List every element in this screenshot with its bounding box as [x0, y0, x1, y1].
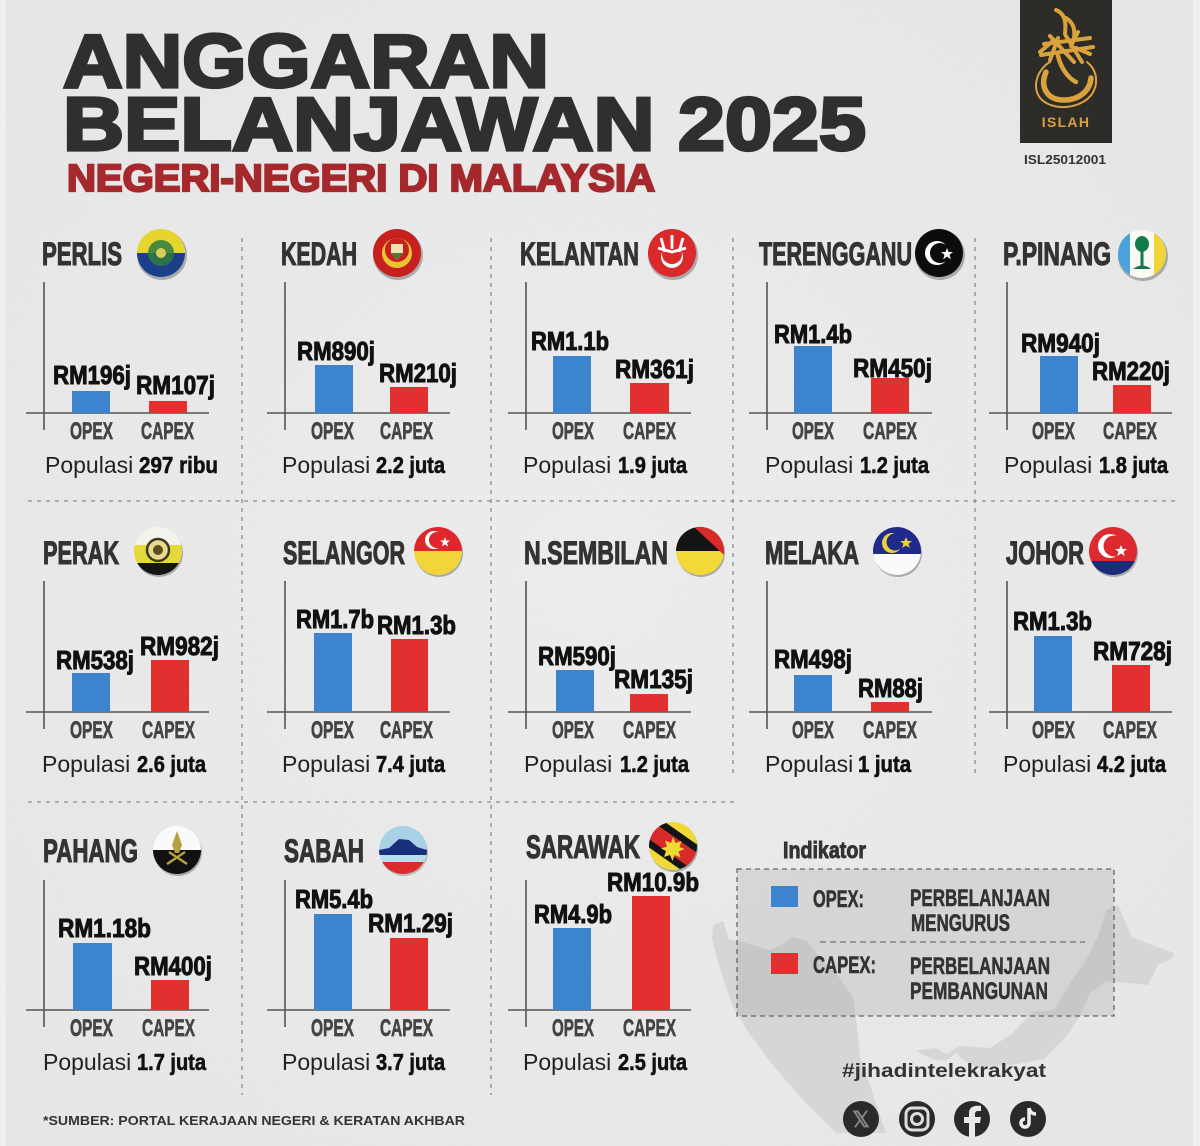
icon: Sabah flag: [379, 826, 428, 876]
panel: Selangor: OPEX: [311, 717, 354, 744]
source note: *SUMBER: PORTAL KERAJAAN NEGERI & KERATAN AKHBAR: [43, 1113, 466, 1128]
panel: P.Pinang: OPEX: [1032, 418, 1075, 445]
panel: Sabah: 3.7 juta: [376, 1049, 445, 1075]
icon: Perak flag: [134, 527, 183, 577]
panel: Kelantan: RM1.1b: [531, 326, 609, 356]
panel: Terengganu: RM1.4b: [774, 319, 852, 349]
panel: Terengganu: RM450j: [853, 353, 932, 383]
panel: Terengganu: CAPEX: [863, 418, 917, 445]
legend: [737, 869, 1114, 1016]
panel: Perlis: RM107j: [136, 370, 215, 400]
panel: Perlis: CAPEX: [141, 418, 194, 445]
panel: Pahang: [26, 826, 212, 1075]
panel: Perlis: PERLIS: [42, 236, 122, 272]
panel: Selangor: RM1.3b: [377, 610, 456, 640]
panel: Melaka: Populasi: [765, 751, 853, 777]
panel: Terengganu: Populasi: [765, 452, 853, 478]
panel: Johor: JOHOR: [1006, 535, 1084, 571]
panel: Sabah: RM5.4b: [295, 884, 373, 914]
icon: Selangor flag: [414, 527, 463, 577]
logo: ISLAH: [1020, 0, 1112, 143]
icon: Penang flag: [1118, 230, 1168, 281]
panel: Perlis: RM196j: [53, 360, 131, 390]
panel: Perak: OPEX: [70, 717, 113, 744]
hashtag: #jihadintelekrakyat: [842, 1061, 1047, 1082]
panel: Melaka: CAPEX: [863, 717, 917, 744]
panel: P.Pinang: Populasi: [1004, 452, 1092, 478]
panel: N.Sembilan: [508, 527, 725, 777]
panel: Johor: Populasi: [1003, 751, 1091, 777]
panel: Kedah: Populasi: [282, 452, 370, 478]
legend: MENGURUS: [911, 910, 1010, 937]
panel: Kedah: [267, 229, 457, 478]
panel: Sabah: Populasi: [282, 1049, 370, 1075]
legend: CAPEX:: [813, 952, 876, 979]
panel: P.Pinang: P.PINANG: [1003, 236, 1111, 272]
icon: X: 𝕏: [852, 1107, 870, 1132]
legend: OPEX:: [813, 886, 864, 913]
panel: N.Sembilan: Populasi: [524, 751, 612, 777]
legend: PERBELANJAAN: [910, 953, 1050, 980]
panel: N.Sembilan: OPEX: [552, 717, 594, 744]
panel: Kedah: RM890j: [297, 336, 375, 366]
panel: Perlis: OPEX: [70, 418, 113, 445]
panel: Kelantan: RM361j: [615, 354, 694, 384]
panel: Perak: RM982j: [140, 631, 219, 661]
icon: Melaka flag: [873, 527, 922, 577]
title: BELANJAWAN 2025: [63, 82, 866, 166]
panel: Kelantan: CAPEX: [623, 418, 676, 445]
panel: Sabah: OPEX: [311, 1015, 354, 1042]
panel: Johor: RM1.3b: [1013, 606, 1092, 636]
panel: Kedah: RM210j: [379, 358, 457, 388]
panel: Sarawak: Populasi: [523, 1049, 611, 1075]
panel: N.Sembilan: 1.2 juta: [620, 751, 689, 777]
icon: Kedah flag: [373, 229, 423, 280]
panel: Sarawak: SARAWAK: [526, 829, 640, 865]
legend heading: Indikator: [783, 837, 866, 863]
panel: Selangor: RM1.7b: [296, 604, 374, 634]
icon: Terengganu flag: [915, 229, 965, 280]
panel: Perak: 2.6 juta: [137, 751, 206, 777]
icon: X: [843, 1101, 879, 1137]
panel: Sabah: SABAH: [284, 833, 364, 869]
panel: Johor: 4.2 juta: [1097, 751, 1166, 777]
icon: Kelantan flag: [648, 229, 698, 280]
panel: Melaka: 1 juta: [858, 751, 911, 777]
panel: Johor: [989, 527, 1172, 777]
panel: Perak: RM538j: [56, 645, 134, 675]
panel: Sarawak: RM4.9b: [534, 899, 612, 929]
panel: Kedah: CAPEX: [380, 418, 433, 445]
background map of Malaysia: [712, 905, 1174, 1133]
panel: Kelantan: KELANTAN: [520, 236, 639, 272]
panel: P.Pinang: CAPEX: [1103, 418, 1157, 445]
panel: Kelantan: OPEX: [552, 418, 594, 445]
panel: Kelantan: 1.9 juta: [618, 452, 687, 478]
legend: PERBELANJAAN: [910, 885, 1050, 912]
panel: Johor: OPEX: [1032, 717, 1075, 744]
panel: Perak: CAPEX: [142, 717, 195, 744]
subtitle: NEGERI-NEGERI DI MALAYSIA: [67, 158, 655, 200]
panel: Terengganu: TERENGGANU: [759, 236, 912, 272]
panel: Kedah: OPEX: [311, 418, 354, 445]
panel: N.Sembilan: CAPEX: [623, 717, 676, 744]
panel: Sabah: CAPEX: [380, 1015, 433, 1042]
panel: N.Sembilan: RM590j: [538, 641, 616, 671]
panel: Pahang: OPEX: [70, 1015, 113, 1042]
panel: Kedah: 2.2 juta: [376, 452, 445, 478]
panel: Pahang: Populasi: [43, 1049, 131, 1075]
panel: Selangor: [267, 527, 463, 777]
panel: Sarawak: 2.5 juta: [618, 1049, 687, 1075]
panel: Perak: Populasi: [42, 751, 130, 777]
panel: Johor: RM728j: [1093, 636, 1172, 666]
panel: Terengganu: [749, 229, 965, 478]
panel: Sarawak: CAPEX: [623, 1015, 676, 1042]
title: [63, 19, 866, 166]
panel: Melaka: RM498j: [774, 644, 852, 674]
panel: N.Sembilan: RM135j: [614, 664, 693, 694]
icon: TikTok: [1010, 1101, 1046, 1137]
icon: Johor flag: [1089, 527, 1138, 577]
title: ANGGARAN: [63, 19, 549, 103]
panel: Pahang: CAPEX: [142, 1015, 195, 1042]
panel: Melaka: RM88j: [858, 673, 923, 703]
logo code: ISL25012001: [1024, 153, 1106, 167]
panel: Pahang: RM400j: [134, 951, 212, 981]
panel: P.Pinang: [989, 230, 1172, 478]
panel: Perlis: Populasi: [45, 452, 133, 478]
panel: Selangor: 7.4 juta: [376, 751, 445, 777]
panel: Sarawak: [508, 822, 699, 1076]
panel: Kedah: KEDAH: [281, 236, 357, 272]
icon: Perlis flag: [137, 229, 187, 280]
panel: P.Pinang: RM220j: [1092, 356, 1170, 386]
panel: Sarawak: RM10.9b: [607, 867, 699, 897]
logo: ISLAH: ISLAH: [1042, 114, 1090, 130]
panel: P.Pinang: 1.8 juta: [1099, 452, 1168, 478]
panel: Melaka: MELAKA: [765, 535, 859, 571]
panel: Pahang: 1.7 juta: [137, 1049, 206, 1075]
panel: Selangor: SELANGOR: [283, 535, 405, 571]
icon: Facebook: [954, 1101, 990, 1137]
panel: Selangor: CAPEX: [380, 717, 433, 744]
panel: Melaka: [749, 527, 932, 777]
panel: Perlis: [26, 229, 218, 478]
icon: Instagram: [899, 1101, 935, 1137]
panel: N.Sembilan: N.SEMBILAN: [524, 535, 668, 571]
panel: Sarawak: OPEX: [552, 1015, 594, 1042]
panel: Selangor: Populasi: [282, 751, 370, 777]
panel: P.Pinang: RM940j: [1021, 328, 1100, 358]
panel: Terengganu: OPEX: [792, 418, 834, 445]
icon: Sarawak flag: [649, 822, 698, 872]
panel: Sabah: [267, 826, 453, 1075]
panel: Kelantan: Populasi: [523, 452, 611, 478]
icon: Negeri Sembilan flag: [676, 527, 725, 577]
panel: Pahang: RM1.18b: [58, 913, 151, 943]
panel: Terengganu: 1.2 juta: [860, 452, 929, 478]
panel: Perak: [26, 527, 219, 777]
panel: Perlis: 297 ribu: [139, 452, 218, 478]
panel: Melaka: OPEX: [792, 717, 834, 744]
icon: Pahang flag: [153, 826, 202, 876]
panel: Perak: PERAK: [43, 535, 119, 571]
panel: Pahang: PAHANG: [43, 833, 138, 869]
legend: PEMBANGUNAN: [910, 978, 1048, 1005]
panel: Kelantan: [508, 229, 698, 478]
panel: Sabah: RM1.29j: [368, 908, 453, 938]
panel: Johor: CAPEX: [1103, 717, 1157, 744]
